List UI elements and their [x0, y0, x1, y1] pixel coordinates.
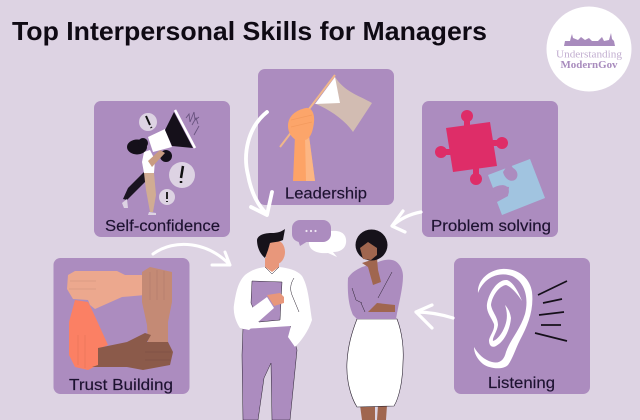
logo: [546, 6, 632, 92]
man: [234, 229, 312, 420]
label: Problem solving: [431, 218, 551, 235]
icon: four linked hands: [67, 267, 173, 370]
title: Top Interpersonal Skills for Managers: [12, 16, 487, 46]
panel: leadership: [258, 69, 394, 205]
panel: trust building: [54, 258, 190, 394]
icon: sound lines: [535, 281, 567, 341]
panel: listening: [454, 258, 590, 394]
arrow: self-confidence: [153, 244, 230, 265]
icon: exclamation bubbles: [139, 113, 195, 205]
icon: ear: [474, 269, 532, 368]
icon: pink puzzle piece: [435, 110, 508, 185]
label: Listening: [488, 375, 555, 392]
arrow: problem solving: [392, 211, 421, 232]
woman: [347, 230, 403, 420]
panel: problem solving: [422, 101, 558, 237]
arrow: listening: [416, 305, 453, 328]
logo: Understanding: [556, 50, 622, 60]
label: Leadership: [285, 186, 367, 202]
icon: woman with megaphone: [122, 110, 199, 215]
icon: fist with flag: [280, 75, 372, 181]
icon: blue puzzle piece: [488, 159, 545, 215]
label: Self-confidence: [105, 218, 220, 235]
arrow: leadership: [246, 112, 272, 215]
speech bubbles: [292, 220, 346, 257]
panel: self-confidence: [94, 101, 230, 237]
logo: ModernGov: [560, 60, 618, 71]
label: Trust Building: [69, 377, 173, 394]
